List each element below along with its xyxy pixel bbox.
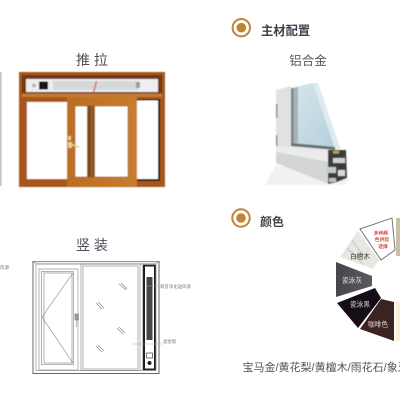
callout: purifier fresh air source label — [146, 283, 191, 290]
glass reflection marks — [96, 283, 127, 352]
heading: 颜色: 颜色 — [260, 214, 284, 229]
swatch: cream — [396, 302, 400, 341]
section icon: colors — [232, 209, 250, 227]
callout: left cut-off label: 风源 — [0, 264, 9, 271]
heading: 主材配置: 主材配置 — [261, 23, 310, 38]
heading: 推拉: 推 拉 — [76, 52, 108, 68]
label: 铝合金: 铝合金 — [289, 53, 327, 68]
callout: purifier fresh air source label: 商音净化送风源 — [160, 283, 191, 290]
heading: 竖装: 竖 装 — [76, 237, 108, 253]
swatch: note — [360, 218, 395, 260]
swatch: note: 色供您 — [375, 236, 389, 243]
sliding window photo — [19, 72, 165, 187]
right pane — [136, 99, 160, 181]
callout: filter label: 滤金窗 — [163, 338, 177, 345]
sliding sash — [67, 97, 137, 186]
swatch: note: 多种颜 — [374, 230, 388, 236]
color swatch wheel — [336, 218, 400, 341]
aluminum profile photo — [265, 83, 350, 185]
door handle — [68, 136, 79, 148]
section icon: main materials — [233, 19, 250, 36]
purifier column — [143, 265, 156, 370]
swatch: note: 选择 — [378, 243, 388, 250]
swatch: ceramic gray: 瓷泳灰 — [342, 276, 362, 284]
swatch: beige — [396, 218, 400, 256]
callout: filter label — [133, 338, 177, 345]
vertical window line drawing — [33, 262, 159, 374]
swatch: coffee: 咖啡色 — [368, 320, 388, 328]
left edge window sliver — [0, 72, 2, 186]
purifier unit — [26, 79, 158, 93]
left pane — [27, 102, 68, 179]
swatch: white sandalwood: 白檀木 — [350, 252, 370, 260]
swatch: ceramic black: 瓷泳黑 — [350, 300, 370, 308]
